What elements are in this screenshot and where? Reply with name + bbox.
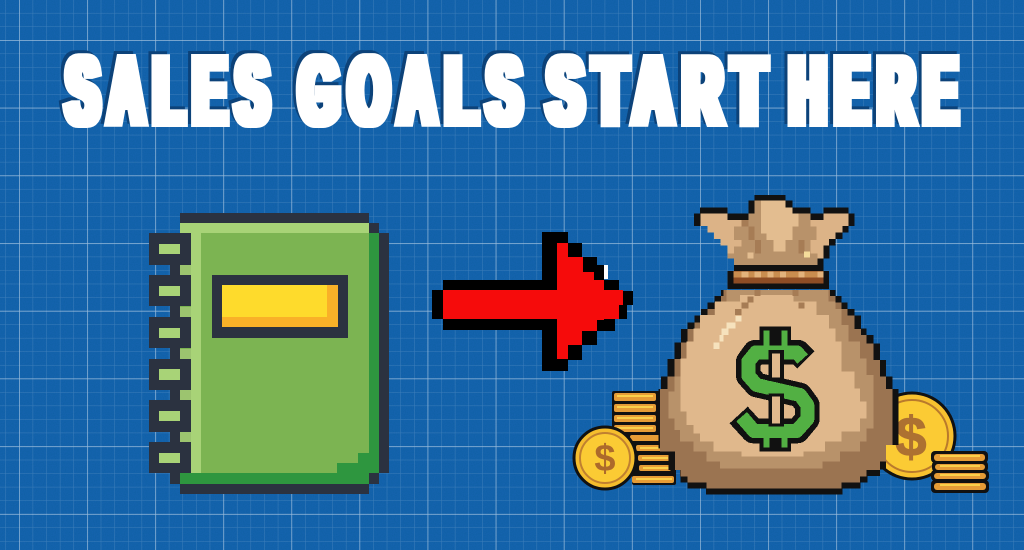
- arrow: [432, 232, 633, 371]
- title: GOALS: [300, 38, 532, 144]
- title: START: [548, 38, 776, 144]
- icon: left coin: [574, 427, 636, 489]
- bag knot: [694, 195, 854, 265]
- bag highlight: [713, 316, 742, 349]
- bag band: [728, 265, 829, 289]
- icon: notebook: [149, 213, 389, 494]
- title: [66, 38, 967, 144]
- title: SALES: [66, 38, 278, 144]
- bag body: [658, 290, 899, 494]
- notebook label: [212, 275, 348, 338]
- icon: dollar sign: [739, 327, 807, 452]
- icon: money bag: [658, 195, 899, 494]
- icon: left coin stack: [612, 391, 676, 485]
- icon: left coin: $: [594, 438, 616, 480]
- icon: right coin: [869, 393, 955, 479]
- icon: right coin stack: [931, 451, 989, 493]
- icon: right coin: $: [895, 405, 927, 468]
- notebook spiral rings: [149, 233, 191, 473]
